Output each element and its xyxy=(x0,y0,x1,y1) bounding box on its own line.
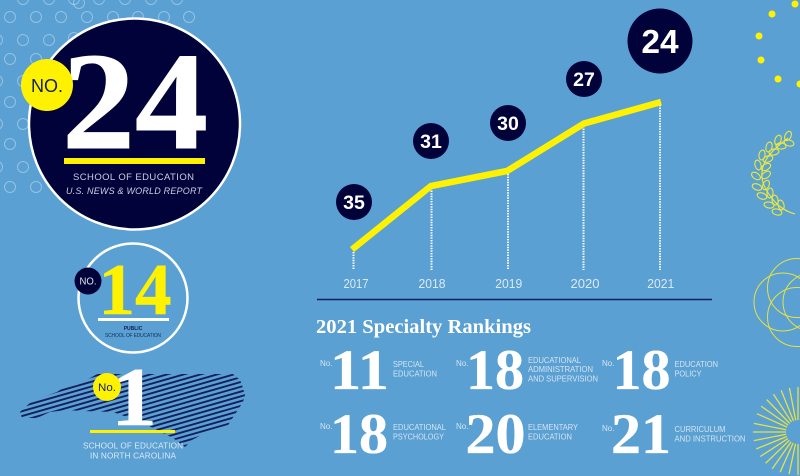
bubble 24 xyxy=(628,8,692,74)
yellow trend line xyxy=(352,102,661,250)
specialty: educational psychology: No. xyxy=(320,422,332,431)
specialty: education policy: EDUCATION xyxy=(674,360,718,369)
specialty: curriculum and instruction: CURRICULUM xyxy=(674,425,726,434)
bubble 31: 31 xyxy=(420,131,442,153)
number 1: 1 xyxy=(111,351,157,444)
badge: No. 24 school of education xyxy=(21,18,240,230)
year labels: 2018 xyxy=(418,276,446,291)
specialty: elementary education: ELEMENTARY xyxy=(528,423,578,432)
number 14: 14 xyxy=(98,249,172,330)
specialty: educational psychology xyxy=(320,403,446,466)
specialty: educational psychology: 18 xyxy=(330,403,388,466)
specialty: special education: EDUCATION xyxy=(393,370,437,378)
year labels xyxy=(344,276,674,291)
yellow No. badge xyxy=(21,59,73,111)
specialty: special education: SPECIAL xyxy=(393,360,424,369)
specialty: educational administration and supervision: 18 xyxy=(466,339,524,402)
heading: specialty rankings: 2021 Specialty Rankings xyxy=(316,316,531,338)
specialty: education policy: No. xyxy=(602,359,614,368)
label: public: PUBLIC xyxy=(124,326,143,332)
year labels: 2019 xyxy=(495,276,522,291)
badge: No. 14 public school xyxy=(74,244,188,352)
specialty: educational administration and supervision: No. xyxy=(456,359,468,368)
specialty: curriculum and instruction: No. xyxy=(602,424,614,433)
specialty: elementary education: EDUCATION xyxy=(528,432,572,442)
striped state map xyxy=(20,374,245,447)
specialty: elementary education xyxy=(456,403,578,466)
bubble 35: 35 xyxy=(343,192,365,214)
bubble 27 xyxy=(566,61,602,97)
specialty: educational administration and supervision: ADMINISTRATION xyxy=(528,365,593,374)
label: school of education in North Carolina: SCHOOL OF EDUCATION xyxy=(83,442,183,450)
line chart: rank by year xyxy=(336,8,692,291)
specialty: educational administration and supervision: AND SUPERVISION xyxy=(528,374,598,384)
decoration: laurel branch xyxy=(750,130,795,216)
yellow No. badge: No. xyxy=(98,382,116,394)
specialty: curriculum and instruction: 21 xyxy=(611,403,671,466)
label: school of education: SCHOOL OF EDUCATION xyxy=(105,333,161,339)
bubble 24: 24 xyxy=(641,24,679,61)
year labels: 2020 xyxy=(570,276,600,291)
label: school of education: SCHOOL OF EDUCATION xyxy=(73,172,194,183)
specialty: educational psychology: PSYCHOLOGY xyxy=(393,432,444,442)
specialty: curriculum and instruction: AND INSTRUCTION xyxy=(674,434,746,444)
number 24: 24 xyxy=(62,25,208,179)
specialty: special education: 11 xyxy=(330,339,389,402)
specialty: special education xyxy=(320,339,437,402)
specialty: educational administration and supervision: EDUCATIONAL xyxy=(528,356,581,365)
specialty: education policy: 18 xyxy=(612,339,670,402)
specialty: education policy: POLICY xyxy=(674,370,702,378)
white bar xyxy=(98,318,169,321)
label: school of education in North Carolina: IN NORTH CAROLINA xyxy=(90,452,177,460)
label: school of education in North Carolina xyxy=(83,442,183,460)
specialty: elementary education: No. xyxy=(456,422,468,431)
bubble 35 xyxy=(336,184,372,220)
specialty: educational psychology: EDUCATIONAL xyxy=(393,423,446,432)
decoration: overlapping circles xyxy=(754,258,800,346)
navy No. badge: NO. xyxy=(80,276,96,288)
year labels: 2017 xyxy=(344,276,368,291)
map: North Carolina No. 1 xyxy=(20,370,245,458)
year labels: 2021 xyxy=(647,276,674,291)
bubble 30: 30 xyxy=(497,113,519,135)
specialty: elementary education: 20 xyxy=(466,403,526,466)
decoration: sunburst xyxy=(753,387,798,475)
decoration: yellow dots xyxy=(756,0,800,88)
specialty: educational administration and supervision xyxy=(456,339,598,402)
yellow No. badge xyxy=(93,373,121,401)
yellow bar xyxy=(90,430,175,433)
specialty: education policy xyxy=(602,339,718,402)
bubble 31 xyxy=(413,123,449,159)
yellow bar xyxy=(64,158,205,164)
specialty: special education: No. xyxy=(320,359,332,368)
bubble 27: 27 xyxy=(573,69,595,91)
yellow No. badge: NO. xyxy=(31,76,63,96)
bubble 30 xyxy=(490,105,526,141)
specialty: curriculum and instruction xyxy=(602,403,746,466)
label: U.S. News and World Report: U.S. NEWS & WORLD REPORT xyxy=(66,186,204,196)
